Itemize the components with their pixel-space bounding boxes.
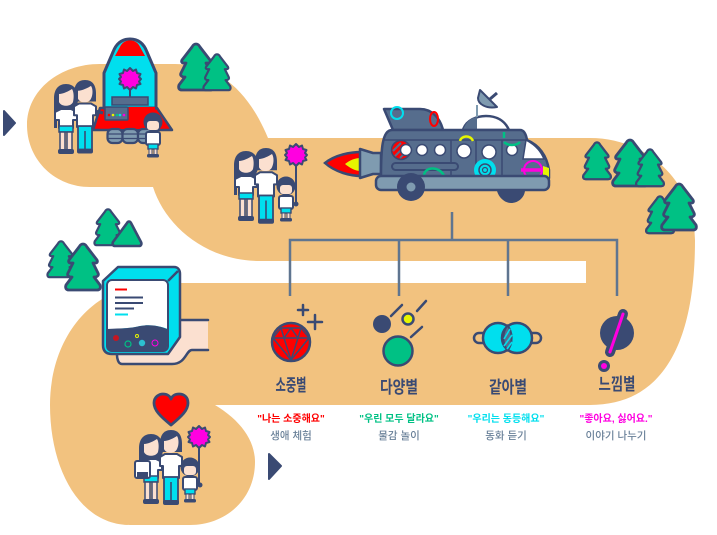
hand holding tablet [117, 320, 208, 364]
connector lines from spaceship to the four stars [290, 212, 617, 296]
icon: different stars [373, 301, 426, 366]
caption: 같아별: 동화 듣기 [485, 430, 527, 442]
trees: left group [47, 209, 141, 290]
caption: 소중별 [257, 412, 325, 442]
family with rocket [54, 80, 162, 158]
icon: exclamation star [598, 314, 634, 372]
caption: 소중별: "나는 소중해요" [257, 412, 325, 425]
trees: right group [583, 140, 696, 233]
caption: 다양별: "우린 모두 달라요" [359, 413, 439, 425]
family with tablet and flower [135, 426, 210, 505]
icon: overlapping stars [474, 323, 541, 353]
caption: 같아별 [468, 412, 545, 442]
icon: heart [154, 394, 188, 425]
family with balloon flower [234, 144, 307, 224]
caption: 느낌별: 이야기 나누기 [586, 430, 646, 442]
trees: top group [179, 44, 231, 90]
tablet device [103, 267, 180, 354]
rocket [93, 39, 172, 143]
title: 다양별: 다양별 [380, 378, 418, 397]
title: 느낌별: 느낌별 [598, 375, 636, 394]
title: 같아별: 같아별 [489, 378, 527, 397]
caption: 같아별: "우리는 동등해요" [468, 412, 545, 425]
icon: ruby star with sparkles [272, 305, 322, 361]
caption: 느낌별 [579, 412, 653, 442]
caption: 소중별: 생애 체험 [270, 429, 312, 442]
arrow: lower marker [269, 454, 281, 479]
caption: 다양별: 물감 놀이 [378, 429, 420, 442]
arrow: top start marker [4, 111, 15, 135]
caption: 다양별 [359, 413, 439, 442]
caption: 느낌별: "좋아요, 싫어요." [579, 412, 653, 425]
spaceship [325, 90, 549, 203]
title: 소중별: 소중별 [276, 376, 306, 395]
